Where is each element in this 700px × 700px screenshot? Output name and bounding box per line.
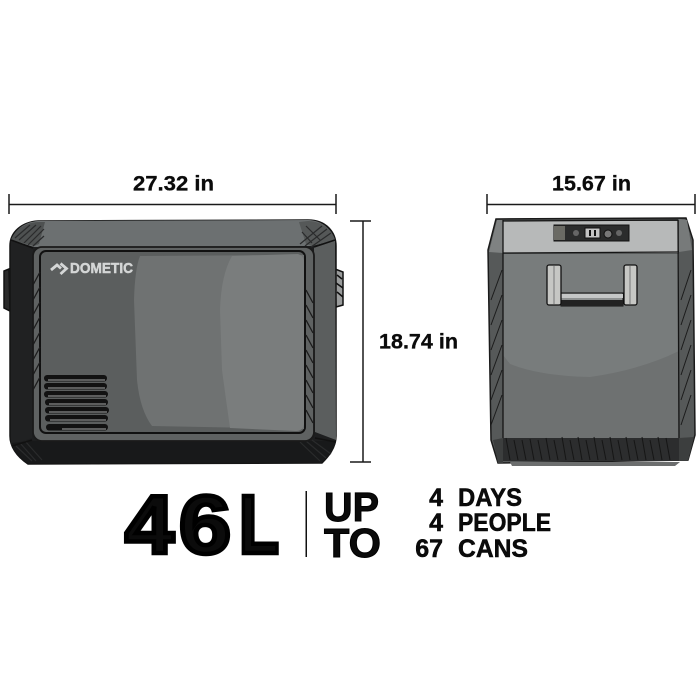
side latches [4, 269, 343, 311]
left edge strip [489, 220, 503, 253]
divider [306, 491, 307, 557]
illustration: cooler front view [4, 220, 343, 464]
base hatching [506, 437, 670, 460]
width label: 27.32 in [133, 172, 214, 196]
ground shadow [510, 462, 680, 466]
depth label: 15.67 in [552, 172, 631, 196]
side front panel [503, 254, 679, 438]
dark base [503, 438, 679, 461]
edge hatching [33, 272, 313, 423]
top-right corner shade [299, 221, 335, 246]
capacity: 46L: 6 [179, 478, 231, 571]
heading: up to [324, 484, 381, 566]
corner hatching [15, 225, 331, 461]
vent grille [44, 375, 109, 430]
people: 4 [429, 509, 443, 537]
logo mark [51, 264, 66, 274]
days: DAYS [458, 484, 522, 512]
top face [503, 221, 678, 253]
side edge hatching [491, 270, 691, 425]
bottom bevel [11, 441, 336, 463]
capacity: 46L [125, 478, 279, 571]
control panel [554, 225, 629, 241]
up: UP [324, 484, 379, 530]
people: PEOPLE [458, 509, 551, 537]
cans: CANS [458, 535, 528, 563]
to: TO [324, 520, 381, 566]
depth dimension: side view [487, 172, 695, 214]
lid highlight middle [134, 255, 304, 429]
left bevel [11, 240, 33, 445]
side outer body [488, 218, 695, 463]
lid panel [40, 251, 305, 433]
width dimension: front view [9, 172, 336, 214]
cans [415, 535, 528, 563]
illustration: cooler side view [488, 218, 695, 466]
lid highlight right [220, 254, 304, 431]
right edge strip [679, 219, 692, 252]
right bevel [314, 240, 336, 440]
capacity stats list [415, 484, 551, 563]
capacity: 46L: L [239, 478, 279, 571]
outer shell [10, 220, 336, 464]
days: 4 [429, 484, 443, 512]
lid frame [33, 247, 314, 441]
height dimension: front view [350, 221, 458, 462]
cans: 67 [415, 535, 443, 563]
brand name: DOMETIC [70, 260, 133, 277]
carry handle [547, 265, 637, 306]
days [429, 484, 522, 512]
panel lighter upper area [503, 254, 679, 377]
top-left corner shade [11, 222, 45, 246]
brand logo [51, 260, 133, 277]
top bevel [11, 220, 335, 247]
capacity: 46L: 4 [125, 478, 174, 571]
height label: 18.74 in [379, 330, 458, 354]
top edge lines [503, 220, 679, 438]
